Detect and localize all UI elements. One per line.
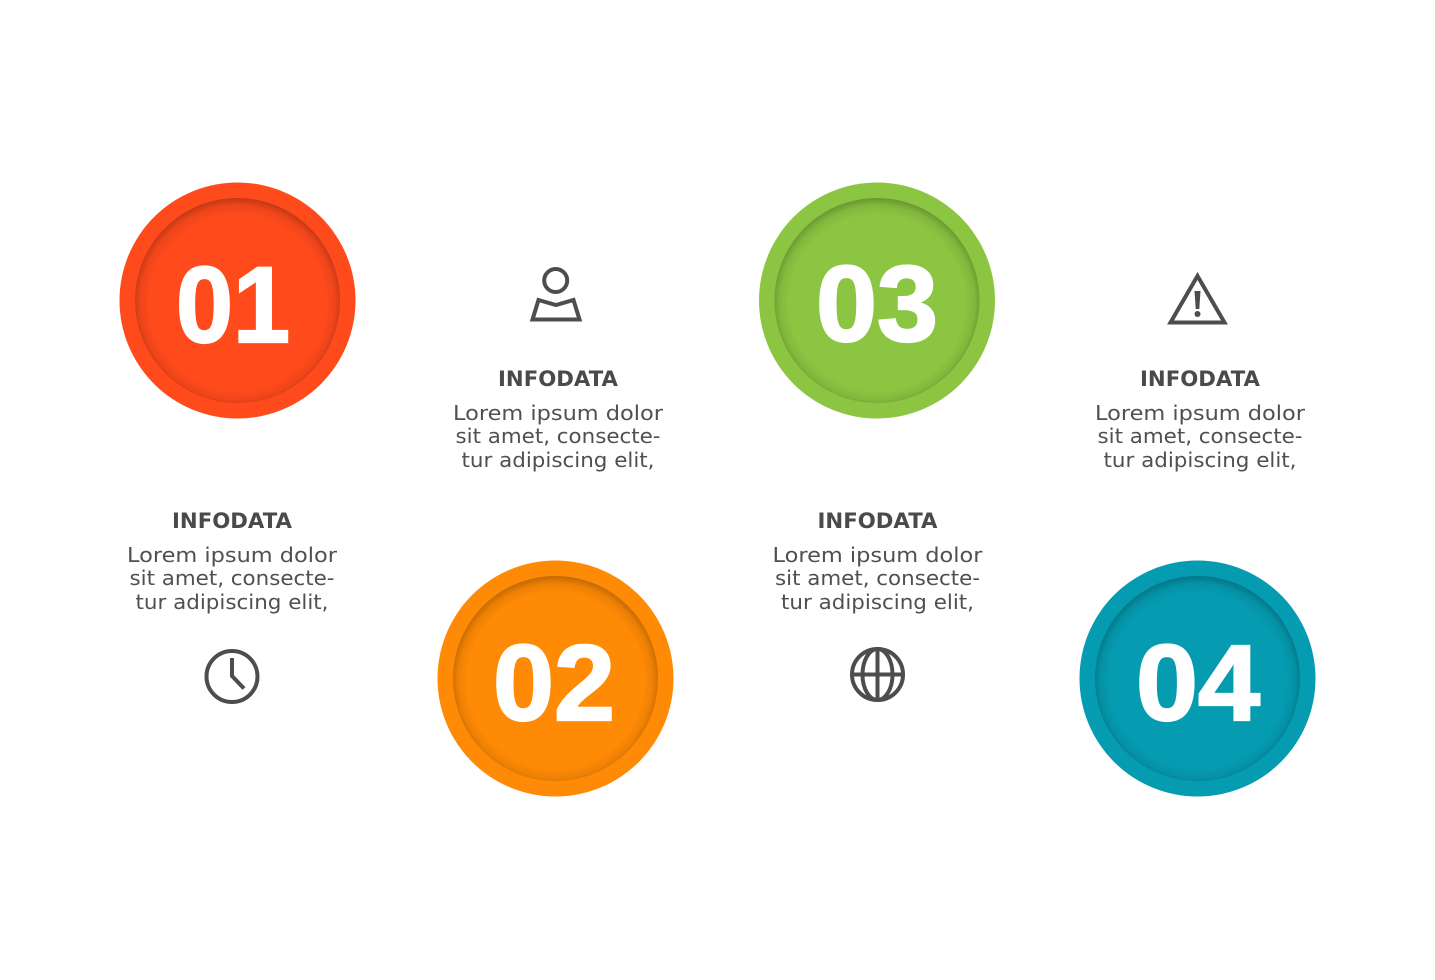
text block: step 02: tur adipiscing elit, [462, 448, 654, 472]
number 02: 02 [493, 622, 615, 743]
text block: step 01: INFODATA [172, 509, 293, 533]
icon: globe [852, 649, 903, 700]
text block: step 02: INFODATA [498, 367, 619, 391]
step 04 badge [1080, 560, 1316, 796]
text block: step 01 [127, 509, 338, 614]
icon: clock [206, 651, 258, 702]
step 03 badge [759, 182, 995, 418]
text block: step 03: tur adipiscing elit, [781, 590, 974, 614]
text block: step 01: sit amet, consecte- [130, 566, 334, 590]
text block: step 01: tur adipiscing elit, [136, 590, 328, 614]
text block: step 04: INFODATA [1140, 367, 1261, 391]
icon: warning triangle [1170, 276, 1224, 322]
text block: step 02: sit amet, consecte- [456, 424, 660, 448]
text block: step 03: sit amet, consecte- [775, 566, 980, 590]
text block: step 01: Lorem ipsum dolor [127, 543, 338, 567]
text block: step 04: sit amet, consecte- [1098, 424, 1302, 448]
number 04: 04 [1136, 622, 1260, 743]
number 03: 03 [816, 243, 938, 364]
number 01: 01 [176, 244, 290, 365]
text block: step 04: Lorem ipsum dolor [1095, 401, 1306, 425]
text block: step 03: Lorem ipsum dolor [772, 543, 983, 567]
text block: step 04 [1095, 367, 1306, 472]
text block: step 03 [772, 509, 983, 614]
step 02 badge [438, 560, 674, 796]
text block: step 03: INFODATA [818, 509, 938, 533]
step 01 badge [120, 182, 356, 418]
icon: map person [532, 269, 580, 320]
text block: step 02: Lorem ipsum dolor [453, 401, 664, 425]
text block: step 02 [453, 367, 664, 472]
text block: step 04: tur adipiscing elit, [1104, 448, 1296, 472]
